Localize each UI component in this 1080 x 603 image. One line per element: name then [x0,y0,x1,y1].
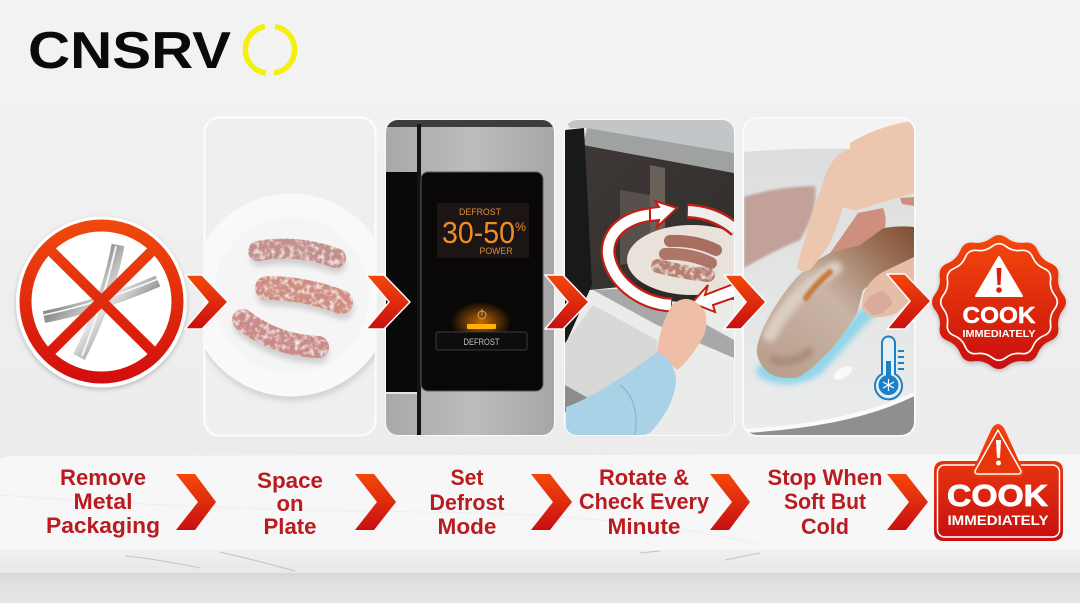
logo ring [245,26,295,73]
cold blue glow [763,295,900,377]
panel: rotate in microwave photo [564,119,735,436]
soft sausage [757,226,914,378]
snow highlight on plate [834,366,852,380]
defrost button: DEFROST [464,337,500,347]
icon: no metal packaging [16,216,187,388]
step label: remove metal packaging: Metal [74,489,132,514]
step label: space on plate [257,468,323,539]
badge: cook immediately seal: COOK [962,302,1036,328]
rotation arrows [608,201,736,312]
step label: remove metal packaging: Packaging [46,513,160,538]
control panel [421,172,543,391]
logo wordmark: CNSRV [28,22,231,80]
badge: cook immediately sign: IMMEDIATELY [948,512,1049,528]
plate and sausages [627,225,734,302]
arrows: bottom row chevrons [176,474,928,530]
step label: stop when soft but cold [768,465,882,539]
step label: stop when soft but cold: Stop When [768,465,882,490]
icon: thermometer with snowflake [875,337,904,399]
step label: space on plate: on [276,491,304,516]
background sausage [744,186,815,268]
display: 30-50 [442,215,515,250]
panel: microwave defrost control [385,119,555,436]
step label: rotate and check: Check Every [579,489,710,514]
power icon and glow [452,303,510,332]
step label: rotate and check [579,465,710,539]
microwave cavity [565,120,734,435]
step label: remove metal packaging [46,465,160,538]
step label: space on plate: Space [257,468,323,493]
sausage shadows [244,255,342,353]
step label: set defrost mode: Set [450,465,484,490]
frozen sausages [243,249,341,347]
steel body [386,120,554,435]
badge: cook immediately seal: IMMEDIATELY [962,328,1036,340]
defrost button [436,332,527,350]
step label: set defrost mode: Mode [438,514,496,539]
badge: cook immediately seal [932,235,1066,369]
warning triangle [976,257,1022,296]
step label: rotate and check: Minute [608,514,680,539]
step label: rotate and check: Rotate & [599,465,689,490]
panel: stop when soft photo [743,118,915,436]
step label: stop when soft but cold: Soft But [784,489,867,514]
display: POWER [480,246,513,257]
plate [205,194,375,402]
step label: set defrost mode: Defrost [430,490,505,515]
arrows: top row chevrons [185,274,931,329]
step label: space on plate: Plate [264,514,316,539]
step label: stop when soft but cold: Cold [801,514,849,539]
display: DEFROST [459,207,501,218]
step label: remove metal packaging: Remove [60,465,146,490]
wall background [0,0,1080,460]
panel: space on plate photo [204,116,376,436]
hand and sleeve [566,299,706,436]
plate [744,119,914,435]
marble counter [0,454,1080,603]
logo [28,22,295,80]
step label: set defrost mode [430,465,505,539]
display: % [515,220,526,234]
badge: cook immediately sign: COOK [947,478,1049,513]
badge: cook immediately sign [934,424,1063,541]
metal strips [44,245,158,357]
fingers [797,121,914,317]
display [437,203,529,258]
